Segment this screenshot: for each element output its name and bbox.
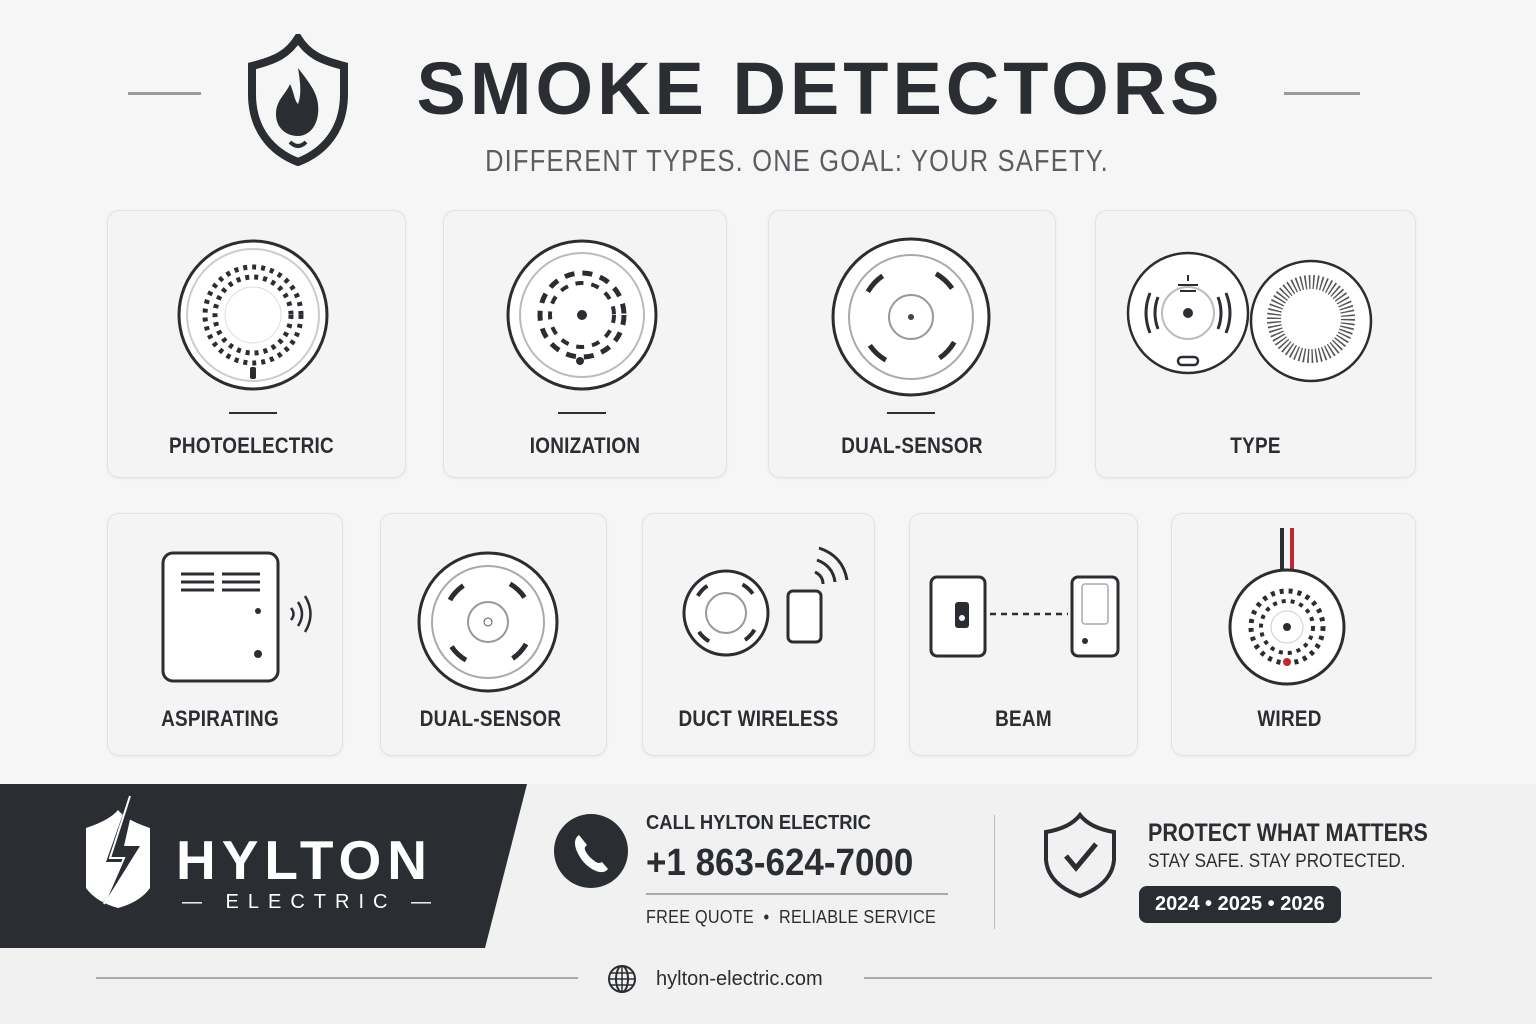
panel: photoelectric [107,210,406,478]
panel: dual-sensor bottom [380,513,607,756]
icon: beam detector pair [930,576,1120,658]
panel: ionization: IONIZATION [530,433,640,458]
panel: duct wireless: DUCT WIRELESS [679,706,838,731]
call block: CALL HYLTON ELECTRIC [646,812,871,834]
website: hylton-electric.com [656,968,823,990]
icon: shield with flame [248,34,348,166]
footer rules [96,977,578,979]
panel: aspirating: ASPIRATING [161,706,279,731]
icon: wired detector [1228,528,1346,686]
header rule left [128,92,201,95]
panel: beam [909,513,1138,756]
panel: dual-sensor top: DUAL-SENSOR [841,433,983,458]
divider [994,815,995,929]
title: SMOKE DETECTORS [417,47,1223,130]
panel: type: TYPE [1230,433,1281,458]
icon: two detectors [1126,252,1372,382]
icon: photoelectric detector [178,240,328,414]
call block: FREE QUOTE • RELIABLE SERVICE [646,907,936,927]
icon: duct wireless detector [682,546,848,656]
panel: ionization [443,210,727,478]
call block: +1 863-624-7000 [646,842,913,884]
panel: photoelectric: PHOTOELECTRIC [169,433,334,458]
subtitle: DIFFERENT TYPES. ONE GOAL: YOUR SAFETY. [485,143,1109,178]
panel: type [1095,210,1416,478]
protect block [1139,819,1428,923]
icon: dual-sensor detector [832,238,990,414]
panel: wired [1171,513,1416,756]
footer band background [0,784,1536,1024]
panel: brand logo [0,784,527,948]
brand sub: — ELECTRIC — [182,891,440,913]
panel: duct wireless [642,513,875,756]
panel: aspirating [107,513,343,756]
icon: ionization detector [506,240,658,414]
protect block: PROTECT WHAT MATTERS [1148,819,1428,847]
brand name: HYLTON [176,829,433,891]
panel: wired: WIRED [1257,706,1322,731]
panel: dual-sensor top [768,210,1056,478]
icon: shield check [1044,812,1116,898]
icon: phone [554,814,628,888]
protect block: 2024 • 2025 • 2026 [1155,893,1325,915]
protect block: STAY SAFE. STAY PROTECTED. [1148,851,1406,872]
header rule right [1284,92,1360,95]
icon: dual-sensor detector [418,552,558,692]
panel: dual-sensor bottom: DUAL-SENSOR [420,706,561,731]
icon: aspirating unit [162,552,312,682]
panel: beam: BEAM [995,706,1052,731]
website [608,965,823,993]
call block [646,812,948,927]
